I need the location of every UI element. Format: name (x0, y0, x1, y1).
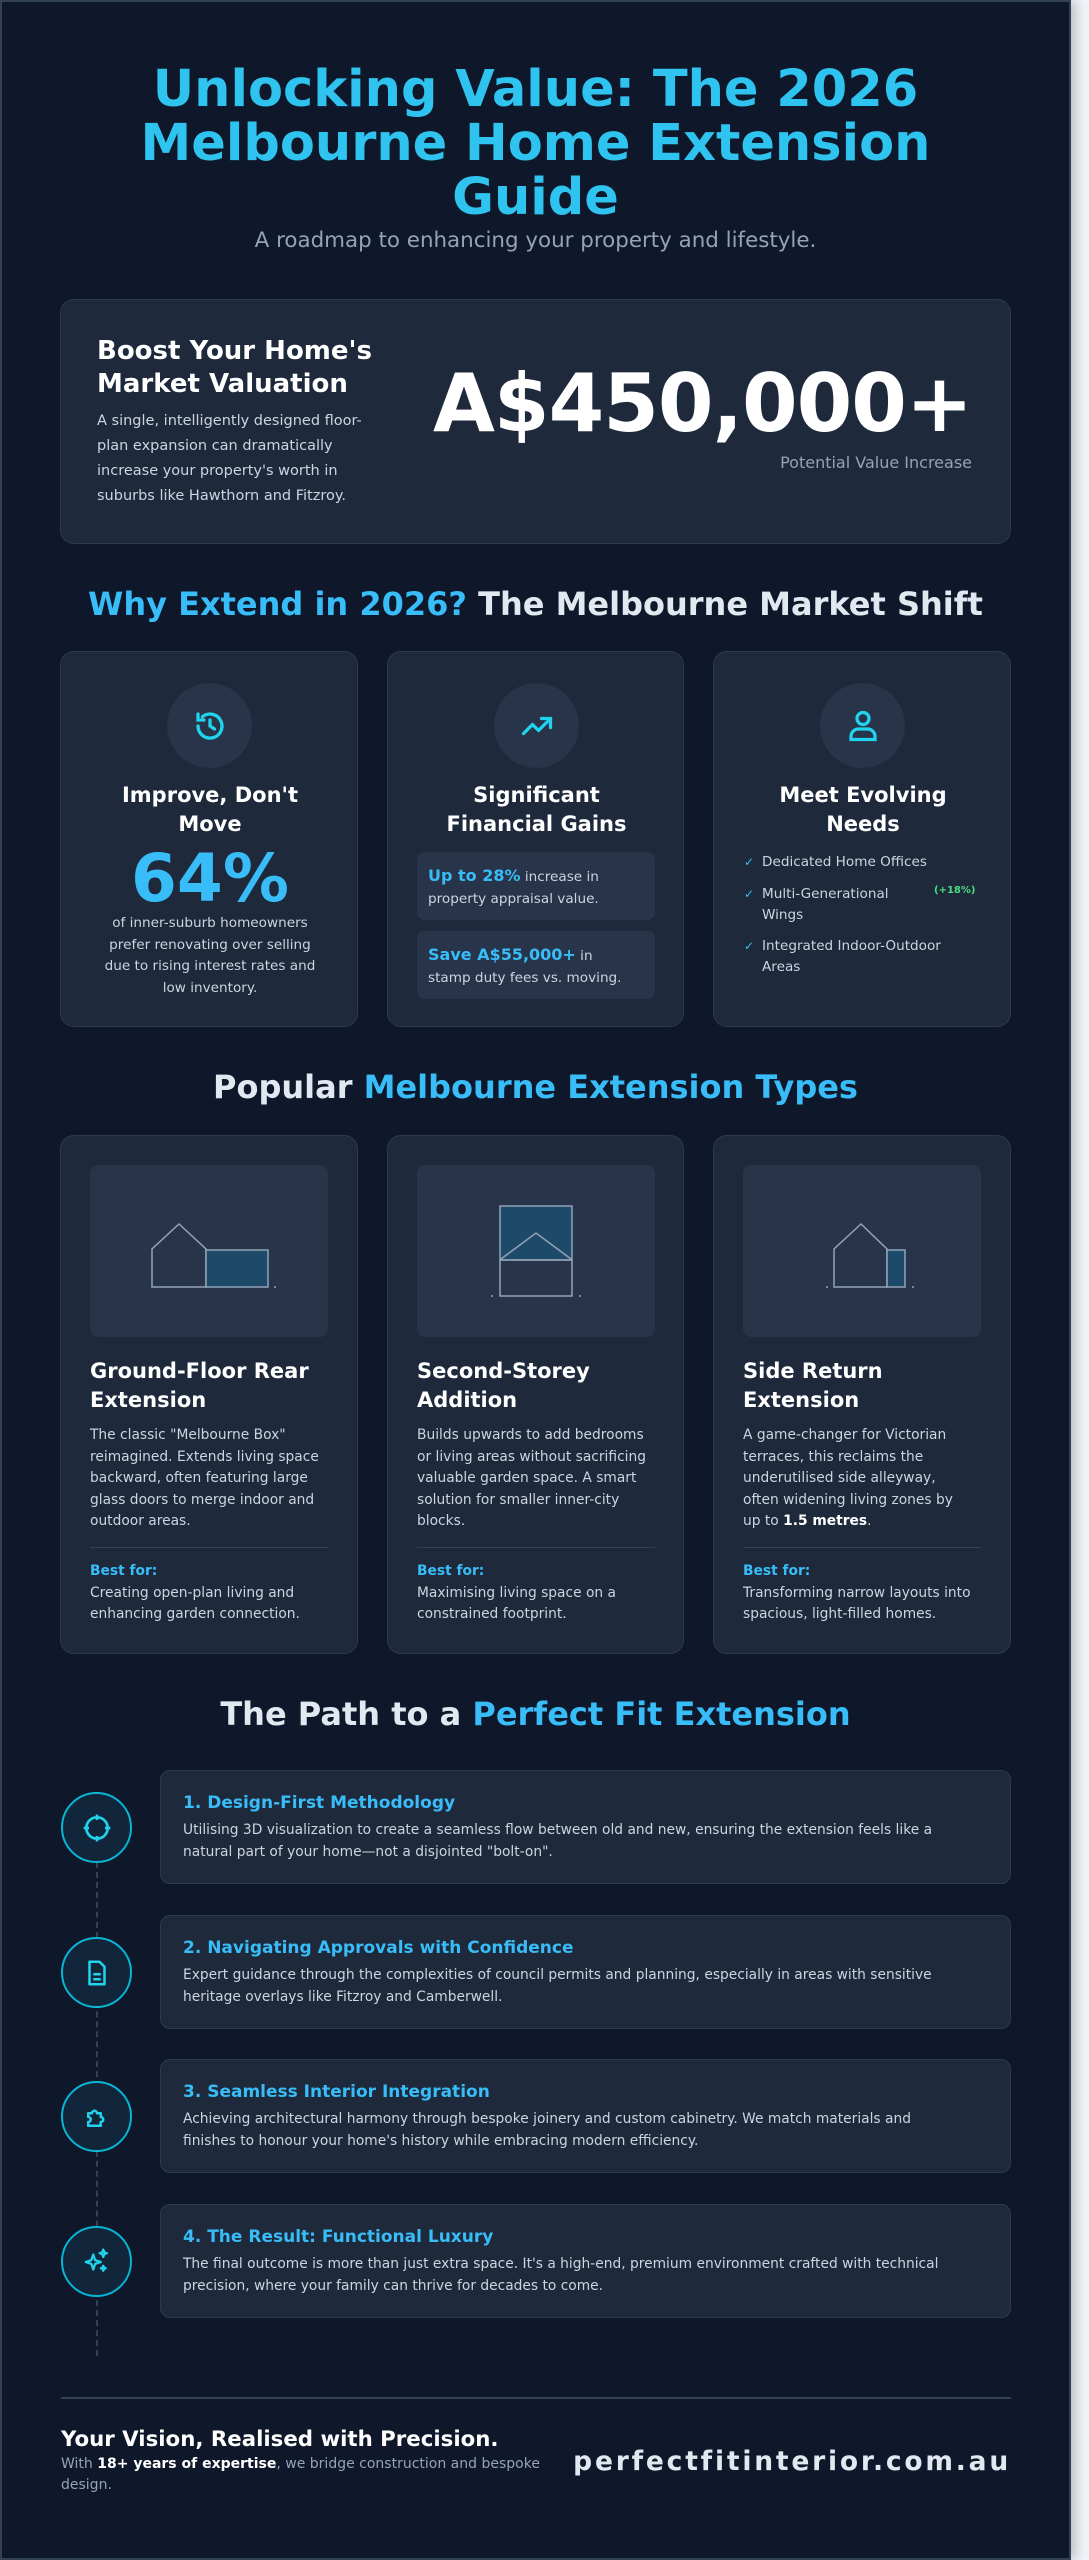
stat box 1 (417, 852, 655, 920)
hero heading (97, 336, 372, 399)
stat box 2: Save A$55,000+ in stamp duty fees vs. moving. (428, 945, 622, 986)
footer tagline: Your Vision, Realised with Precision. (61, 2427, 499, 2452)
panel: financial gains (387, 651, 684, 1027)
step 1 (160, 1770, 1011, 1884)
footer tagline (60, 2427, 540, 2493)
list: Integrated Indoor-Outdoor Areas (762, 938, 941, 975)
hero heading: Boost Your Home's (97, 336, 372, 366)
stat text: prefer renovating over selling (109, 936, 311, 952)
best for: Best for: (90, 1563, 157, 1579)
footer tagline: With 18+ years of expertise, we bridge construction and bespoke design. (61, 2456, 540, 2493)
list: Multi-Generational Wings (762, 886, 889, 923)
step 3: 3. Seamless Interior Integration (183, 2082, 490, 2102)
card title: Financial Gains (446, 812, 626, 836)
stat text: due to rising interest rates and (105, 958, 315, 974)
step 2: 2. Navigating Approvals with Confidence (183, 1938, 574, 1958)
title (417, 1359, 590, 1412)
card title: Move (178, 812, 242, 836)
best for: Maximising living space on a constrained footprint. (417, 1584, 616, 1622)
step 3: Achieving architectural harmony through bespoke joinery and custom cabinetry. We match materials and finishes to honour your home's history while embracing modern efficiency. (183, 2111, 911, 2149)
step 4: The final outcome is more than just extra space. It's a high-end, premium environment crafted with technical precision, where your family can thrive for decades to come. (183, 2256, 938, 2294)
stat text: of inner-suburb homeowners (112, 915, 308, 931)
step 3 (160, 2059, 1011, 2173)
best for (90, 1563, 300, 1622)
list: ✓ (744, 855, 754, 869)
card title (779, 783, 947, 836)
icon: refresh (167, 683, 252, 768)
desc: The classic "Melbourne Box" reimagined. Extends living space backward, often featuring large glass doors to merge indoor and outdoor areas. (90, 1427, 319, 1529)
icon: user (820, 683, 905, 768)
step 4: 4. The Result: Functional Luxury (183, 2227, 493, 2247)
title: Melbourne Home Extension (141, 114, 930, 173)
panel: improve don't move (60, 651, 358, 1027)
heading: path: The Path to a Perfect Fit Extension (220, 1695, 851, 1733)
illustration (417, 1165, 655, 1337)
illustration (90, 1165, 328, 1337)
list: ✓ (744, 886, 754, 900)
best for (417, 1563, 616, 1622)
list (744, 854, 975, 975)
step 1: Utilising 3D visualization to create a seamless flow between old and new, ensuring the extension feels like a natural part of your home—not a disjointed "bolt-on". (183, 1822, 932, 1860)
panel: second storey (387, 1135, 684, 1654)
list: ✓ (744, 938, 754, 952)
desc: A game-changer for Victorian terraces, this reclaims the underutilised side alleyway, often widening living zones by up to 1.5 metres. (743, 1427, 953, 1529)
footer url: perfectfitinterior.com.au (573, 2446, 1011, 2477)
stat box 2 (417, 931, 655, 999)
desc: Builds upwards to add bedrooms or living areas without sacrificing valuable garden space. A smart solution for smaller inner-city blocks. (417, 1427, 646, 1529)
stat text: low inventory. (163, 980, 257, 996)
heading: extension types: Popular Melbourne Extension Types (213, 1068, 858, 1106)
card title: Significant (473, 783, 600, 807)
timeline line (96, 1862, 98, 2356)
step 2 (160, 1915, 1011, 2029)
best for: Best for: (417, 1563, 484, 1579)
card title (122, 783, 298, 836)
title: Addition (417, 1388, 517, 1412)
title: Unlocking Value: The 2026 (153, 60, 918, 119)
title: Extension (743, 1388, 859, 1412)
best for (742, 1563, 971, 1622)
subtitle: A roadmap to enhancing your property and lifestyle. (255, 228, 816, 253)
best for: Creating open-plan living and enhancing garden connection. (90, 1584, 300, 1622)
best for: Transforming narrow layouts into spacious, light-filled homes. (743, 1584, 971, 1622)
step 2: Expert guidance through the complexities of council permits and planning, especially in areas with sensitive heritage overlays like Fitzroy and Camberwell. (183, 1967, 932, 2005)
step 1: 1. Design-First Methodology (183, 1793, 455, 1813)
card title (446, 783, 626, 836)
icon: trend (494, 683, 579, 768)
icon: step 4 (61, 2226, 132, 2297)
icon: step 2 (61, 1937, 132, 2008)
best for: Best for: (743, 1563, 810, 1579)
stat label: Potential Value Increase (780, 453, 972, 472)
title: Side Return (743, 1359, 883, 1383)
big stat: A$450,000+ (433, 357, 972, 450)
step 4 (160, 2204, 1011, 2318)
title: Guide (452, 168, 619, 227)
panel: side return (713, 1135, 1011, 1654)
card title: Improve, Don't (122, 783, 298, 807)
title (90, 1359, 309, 1412)
icon: step 3 (61, 2081, 132, 2152)
title: Extension (90, 1388, 206, 1412)
hero heading: Market Valuation (97, 369, 348, 399)
title: Ground-Floor Rear (90, 1359, 309, 1383)
title: Second-Storey (417, 1359, 590, 1383)
hero text: A single, intelligently designed floor-​plan expansion can dramatically increase your property's worth in suburbs like Hawthorn and Fitzroy. (97, 413, 362, 504)
stat box 1: Up to 28% increase in property appraisal value. (428, 866, 599, 907)
list: (+18%) (934, 884, 975, 896)
icon: step 1 (61, 1792, 132, 1863)
heading: why extend: Why Extend in 2026? The Melbourne Market Shift (88, 585, 983, 623)
list: Dedicated Home Offices (762, 854, 927, 870)
card title: Meet Evolving (779, 783, 947, 807)
stat text (105, 915, 315, 996)
title (141, 60, 930, 227)
card title: Needs (826, 812, 900, 836)
panel: ground floor rear (60, 1135, 358, 1654)
title (743, 1359, 883, 1412)
panel: evolving needs (713, 651, 1011, 1027)
panel: hero valuation (60, 299, 1011, 544)
stat 64%: 64% (131, 840, 289, 917)
illustration (743, 1165, 981, 1337)
